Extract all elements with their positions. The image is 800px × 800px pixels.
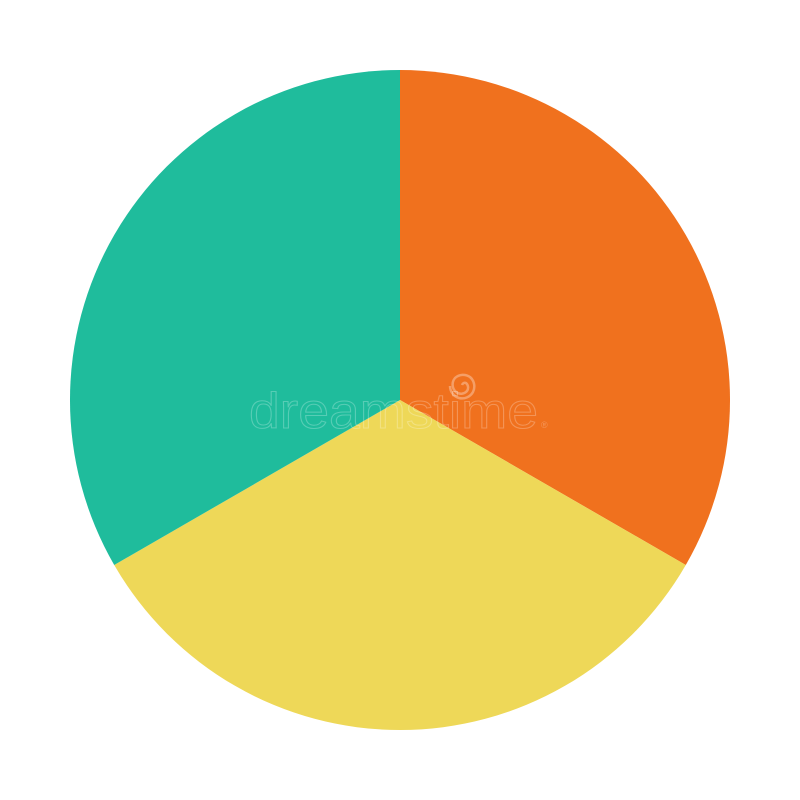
slice: yellow	[114, 400, 686, 730]
watermark	[249, 375, 548, 439]
watermark logo	[450, 375, 474, 398]
slice: orange	[400, 70, 730, 565]
slice: teal	[70, 70, 400, 565]
watermark text: dreamstime	[249, 383, 538, 439]
watermark registered mark: ®	[541, 420, 548, 430]
